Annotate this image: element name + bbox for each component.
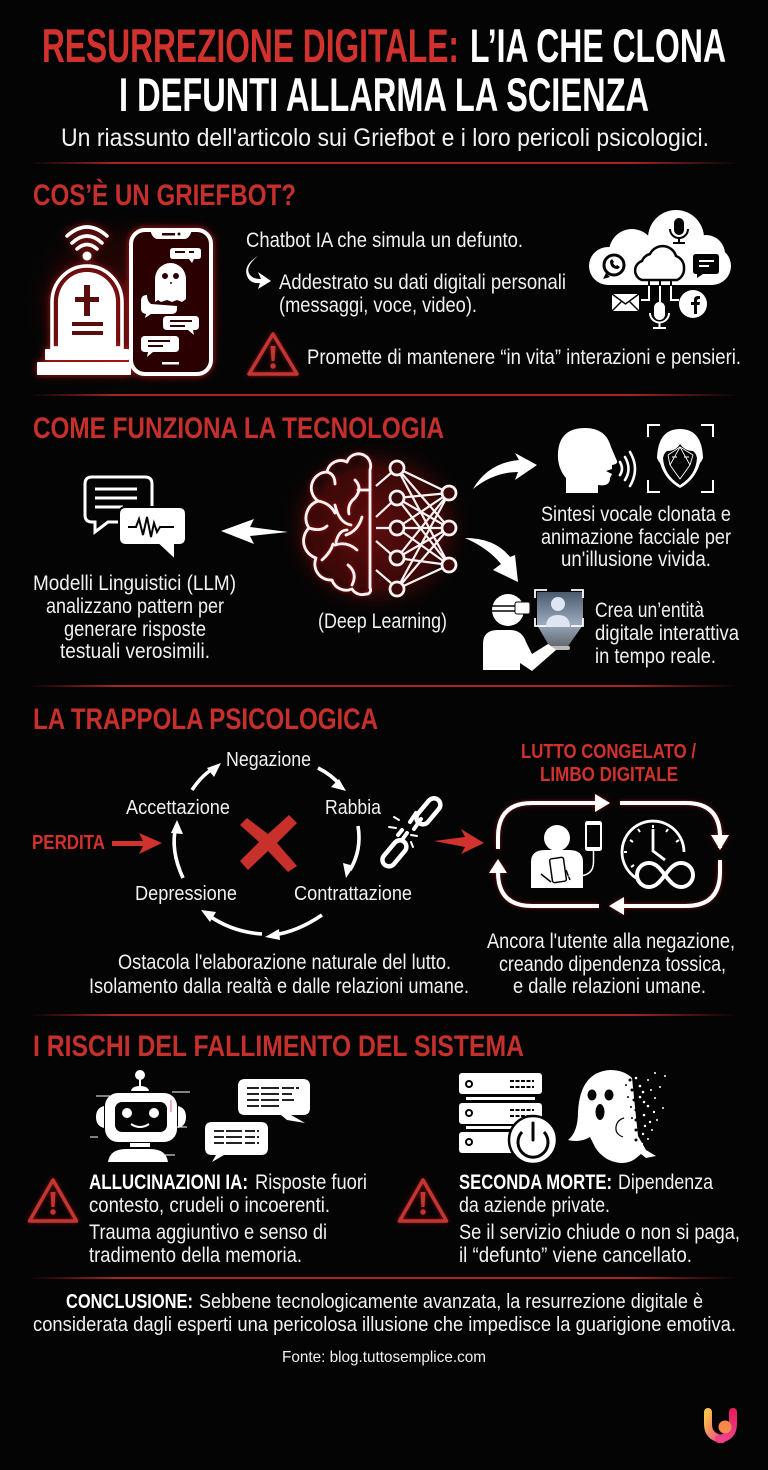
icon: red x [240, 815, 297, 872]
title: RESURREZIONE DIGITALE: [42, 19, 459, 72]
text: voice synthesis: Sintesi vocale clonata e [541, 503, 731, 526]
label: deep learning: (Deep Learning) [318, 610, 447, 633]
icon: chat bubbles [85, 477, 186, 560]
stage labels: Accettazione [126, 797, 230, 819]
text: language models: testuali verosimili. [60, 640, 210, 663]
icon: curved arrow [246, 256, 271, 289]
panel: i rischi del fallimento [30, 1030, 740, 1267]
text: digital entity: Crea un’entità [595, 599, 704, 622]
icon: clock and infinity [622, 821, 693, 887]
arrow: to language models [221, 519, 288, 544]
heading: rischi: I RISCHI DEL FALLIMENTO DEL SISTEMA [33, 1030, 524, 1063]
arrow: to digital entity [465, 538, 518, 582]
label: perdita: PERDITA [32, 832, 105, 854]
icon: warning triangle [30, 1180, 76, 1221]
text: limbo note [487, 930, 735, 998]
icon: glitching robot [90, 1070, 190, 1162]
text: grief cycle note: Isolamento dalla realtà e dalle relazioni umane. [89, 975, 469, 998]
stage labels [126, 749, 412, 905]
icon: user tethered to phone [531, 821, 602, 888]
text: voice synthesis [541, 503, 731, 571]
text: language models [33, 572, 236, 663]
conclusion: CONCLUSIONE: [66, 1291, 193, 1313]
text: limbo note: e dalle relazioni umane. [513, 975, 706, 998]
text: AI hallucinations: tradimento della memoria. [89, 1244, 302, 1267]
arrow: chain to limbo [434, 829, 484, 854]
icon: broken chain [380, 796, 443, 869]
icon: speaking head [558, 428, 635, 493]
text: second death [459, 1171, 740, 1267]
loop arrows [489, 794, 729, 915]
stage labels: Rabbia [325, 797, 382, 819]
panel: cos'è un griefbot [17, 178, 741, 394]
text: second death: da aziende private. [459, 1194, 610, 1217]
text: limbo note: Ancora l'utente alla negazione, [487, 930, 735, 953]
stage labels: Depressione [135, 883, 237, 905]
text: AI hallucinations: ALLUCINAZIONI IA: [89, 1171, 248, 1194]
heading: lutto congelato [521, 741, 696, 786]
text: language models: Modelli Linguistici (LLM) [33, 572, 236, 595]
icon: facial scan [648, 425, 713, 492]
icon: warning triangle [400, 1180, 446, 1221]
text: voice synthesis: un'illusione vivida. [561, 548, 711, 571]
icon: brain and neural network [276, 436, 476, 620]
text: second death: SECONDA MORTE: [459, 1171, 612, 1194]
panel: la trappola psicologica [32, 703, 735, 998]
text: AI hallucinations [89, 1171, 367, 1267]
text: language models: generare risposte [64, 618, 206, 641]
subtitle: Un riassunto dell'articolo sui Griefbot e i loro pericoli psicologici. [61, 124, 709, 152]
text: training data: Addestrato su dati digitali personali [279, 271, 566, 294]
stage labels: Contrattazione [294, 883, 412, 905]
conclusion: Sebbene tecnologicamente avanzata, la resurrezione digitale è [199, 1291, 703, 1313]
heading: lutto congelato: LIMBO DIGITALE [540, 764, 678, 786]
text: training data: (messaggi, voce, video). [279, 294, 477, 317]
heading: lutto congelato: LUTTO CONGELATO / [521, 741, 696, 763]
text: voice synthesis: animazione facciale per [541, 526, 731, 549]
icon: VR user with hologram [483, 590, 583, 671]
heading: tecnologia: COME FUNZIONA LA TECNOLOGIA [33, 412, 444, 445]
text: grief cycle note [89, 951, 469, 998]
heading: griefbot: COS’È UN GRIEFBOT? [33, 178, 296, 212]
text: training data [279, 271, 566, 317]
text: AI hallucinations: contesto, crudeli o incoerenti. [89, 1194, 330, 1217]
conclusion [33, 1291, 736, 1336]
title [42, 19, 726, 121]
arrow: to voice synthesis [473, 453, 537, 489]
panel: come funziona la tecnologia [33, 412, 739, 671]
text: definition: Chatbot IA che simula un defunto. [246, 229, 523, 252]
source: Fonte: blog.tuttosemplice.com [282, 1349, 486, 1366]
text: digital entity: digitale interattiva [595, 622, 739, 645]
icon: digital tombstone and phone [17, 210, 233, 394]
text: second death: il “defunto” viene cancellato. [459, 1244, 692, 1267]
diagram: frozen grief loop [489, 794, 729, 915]
heading: trappola: LA TRAPPOLA PSICOLOGICA [33, 703, 378, 736]
logo [708, 1412, 733, 1439]
text: AI hallucinations: Risposte fuori [255, 1171, 367, 1194]
text: digital entity [595, 599, 739, 668]
text: limbo note: creando dipendenza tossica, [499, 953, 726, 976]
diagram: stages of grief cycle [126, 749, 412, 940]
icon: warning triangle [249, 334, 297, 374]
stage labels: Negazione [226, 749, 311, 771]
icon: glitched speech bubbles [205, 1079, 310, 1162]
text: language models: analizzano pattern per [46, 595, 224, 618]
arrow: perdita to cycle [112, 833, 162, 854]
icon: server with power button [459, 1073, 557, 1164]
text: AI hallucinations: Trauma aggiuntivo e senso di [89, 1221, 327, 1244]
cycle arrows [171, 763, 359, 940]
text: grief cycle note: Ostacola l'elaborazione naturale del lutto. [118, 951, 451, 974]
icon: dissolving ghost [568, 1070, 666, 1163]
text: digital entity: in tempo reale. [595, 645, 716, 668]
text: second death: Dipendenza [618, 1171, 713, 1194]
icon: cloud of personal data [589, 210, 731, 328]
